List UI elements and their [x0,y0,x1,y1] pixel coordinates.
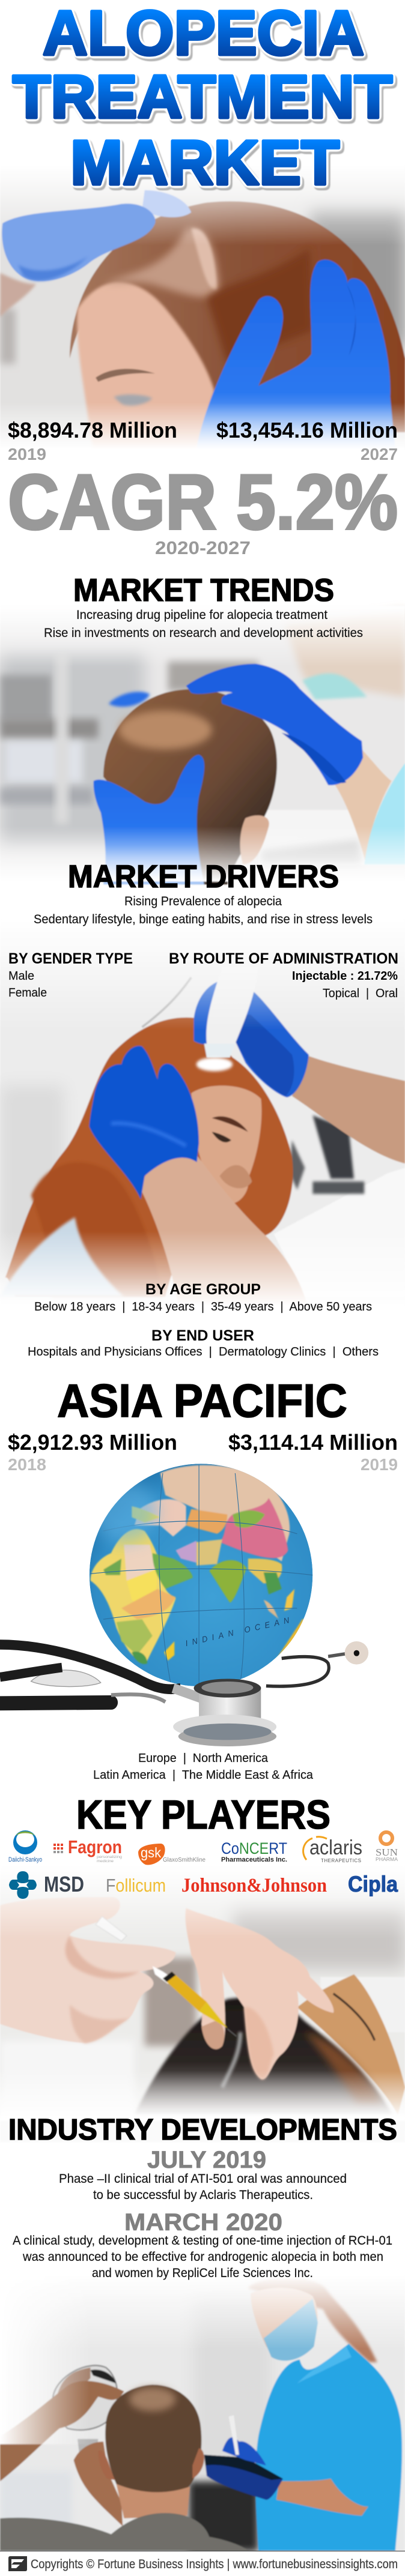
heading: market trends: MARKET TRENDS [73,573,334,608]
development: July 2019: JULY 2019 [147,2147,266,2173]
asia pacific values: $3,114.14 Million [228,1430,398,1455]
logo: Fagron: medicine [97,1860,114,1863]
segment: by route of administration: Injectable : 21.72% [292,970,398,983]
asia pacific values [8,1430,398,1474]
title: ALOPECIA [43,0,364,68]
segment: by end user: BY END USER [151,1327,254,1344]
logo: Fagron: personalizing [97,1856,122,1859]
logo: Fagron: Fagron [68,1836,122,1857]
logo: Fagron [53,1836,122,1863]
logo: GSK [138,1844,206,1865]
logo: Johnson & Johnson: Johnson&Johnson [181,1875,327,1896]
asia pacific values: 2018 [8,1455,46,1474]
asia pacific values: 2019 [361,1455,398,1474]
logo: Follicum: Follicum [106,1875,166,1896]
title [13,0,392,198]
market drivers list: Sedentary lifestyle, binge eating habits, and rise in stress levels [34,912,373,926]
logo: Cipla: Cipla [348,1872,398,1896]
logo: Sun Pharma: PHARMA [376,1857,398,1862]
logo: Daiichi-Sankyo: Daiichi-Sankyo [8,1856,42,1863]
other regions list: Europe | North America [138,1752,269,1765]
market size values: 2027 [361,445,398,463]
development: July 2019 [59,2147,347,2202]
logo: Sun Pharma: SUN [376,1847,398,1858]
segment: by gender type: Male [8,970,34,983]
market drivers list [34,894,373,926]
market trends list: Rise in investments on research and development activities [44,626,363,640]
logo: Daiichi-Sankyo [8,1830,42,1863]
asia pacific values: $2,912.93 Million [8,1430,177,1455]
stethoscope [0,1641,368,1746]
market size values: $8,894.78 Million [8,418,177,442]
logo: GSK: GlaxoSmithKline [163,1857,206,1863]
segment: by end user: Hospitals and Physicians Offices | Dermatology Clinics | Others [28,1345,379,1359]
market drivers list: Rising Prevalence of alopecia [124,894,282,908]
title: MARKET [70,128,340,198]
CAGR figure: 2020-2027 [155,537,251,558]
logo: GSK: gsk [141,1845,161,1860]
segment: by age group: Below 18 years | 18-34 years | 35-49 years | Above 50 years [34,1300,372,1314]
icon: globe with stethoscope [0,1464,368,1746]
photo: doctor examining man's crown [0,606,405,884]
development: March 2020: A clinical study, development & testing of one-time injection of RCH-01 [13,2234,392,2248]
other regions list: Latin America | The Middle East & Africa [93,1769,314,1782]
logo: Aclaris Therapeutics: aclaris [309,1836,362,1859]
heading: industry developments: INDUSTRY DEVELOPMENTS [8,2114,397,2146]
logo: Aclaris Therapeutics [303,1836,362,1863]
photo: scalp injection with syringe [0,1867,405,2144]
heading: key players: KEY PLAYERS [76,1792,330,1838]
icon: Fortune Business Insights logo [8,2556,27,2571]
segment: by gender type: Female [8,986,47,1000]
market trends list [44,608,363,640]
segment: by gender type: BY GENDER TYPE [8,950,133,967]
development: July 2019: to be successful by Aclaris Therapeutics. [93,2188,313,2202]
other regions list [93,1752,314,1782]
logo: Sun Pharma [376,1832,398,1862]
market size values: $13,454.16 Million [216,418,398,442]
segment: by age group [34,1281,372,1314]
segment: by route of administration: BY ROUTE OF ADMINISTRATION [169,950,398,967]
logo: MSD: MSD [44,1872,84,1896]
logo: Concert Pharmaceuticals: Pharmaceuticals Inc. [221,1856,287,1863]
photo: woman's thinning hair parting examined by gloved hands [0,166,405,457]
photo: device on woman's scalp with blue gloves [0,920,405,1321]
development: July 2019: Phase –II clinical trial of ATI-501 oral was announced [59,2172,347,2186]
development: March 2020: MARCH 2020 [124,2209,282,2236]
market trends list: Increasing drug pipeline for alopecia treatment [76,608,327,622]
globe [90,1464,312,1686]
segment: by end user [28,1327,379,1359]
title: TREATMENT [13,64,392,131]
heading: market drivers: MARKET DRIVERS [68,859,339,894]
photo: nurse with clipboard and man looking in mirror [0,2275,405,2551]
market size values [8,418,398,463]
heading: asia pacific: ASIA PACIFIC [57,1374,347,1427]
logo: MSD [9,1871,84,1899]
logo: Aclaris Therapeutics: THERAPEUTICS [321,1858,361,1863]
segment: by age group: BY AGE GROUP [145,1281,261,1298]
footer [0,2551,405,2576]
development: March 2020 [13,2209,392,2280]
segment: by route of administration [169,950,398,1000]
segment: by route of administration: Topical | Oral [323,987,398,1000]
globe: INDIAN OCEAN [184,1615,290,1648]
development: March 2020: was announced to be effective for androgenic alopecia in both men [22,2250,383,2264]
market size values: 2019 [8,445,46,463]
logo: Concert Pharmaceuticals: CoNCERT [221,1839,287,1857]
segment: by gender type [8,950,133,1000]
development: March 2020: and women by RepliCel Life Sciences Inc. [92,2266,313,2280]
